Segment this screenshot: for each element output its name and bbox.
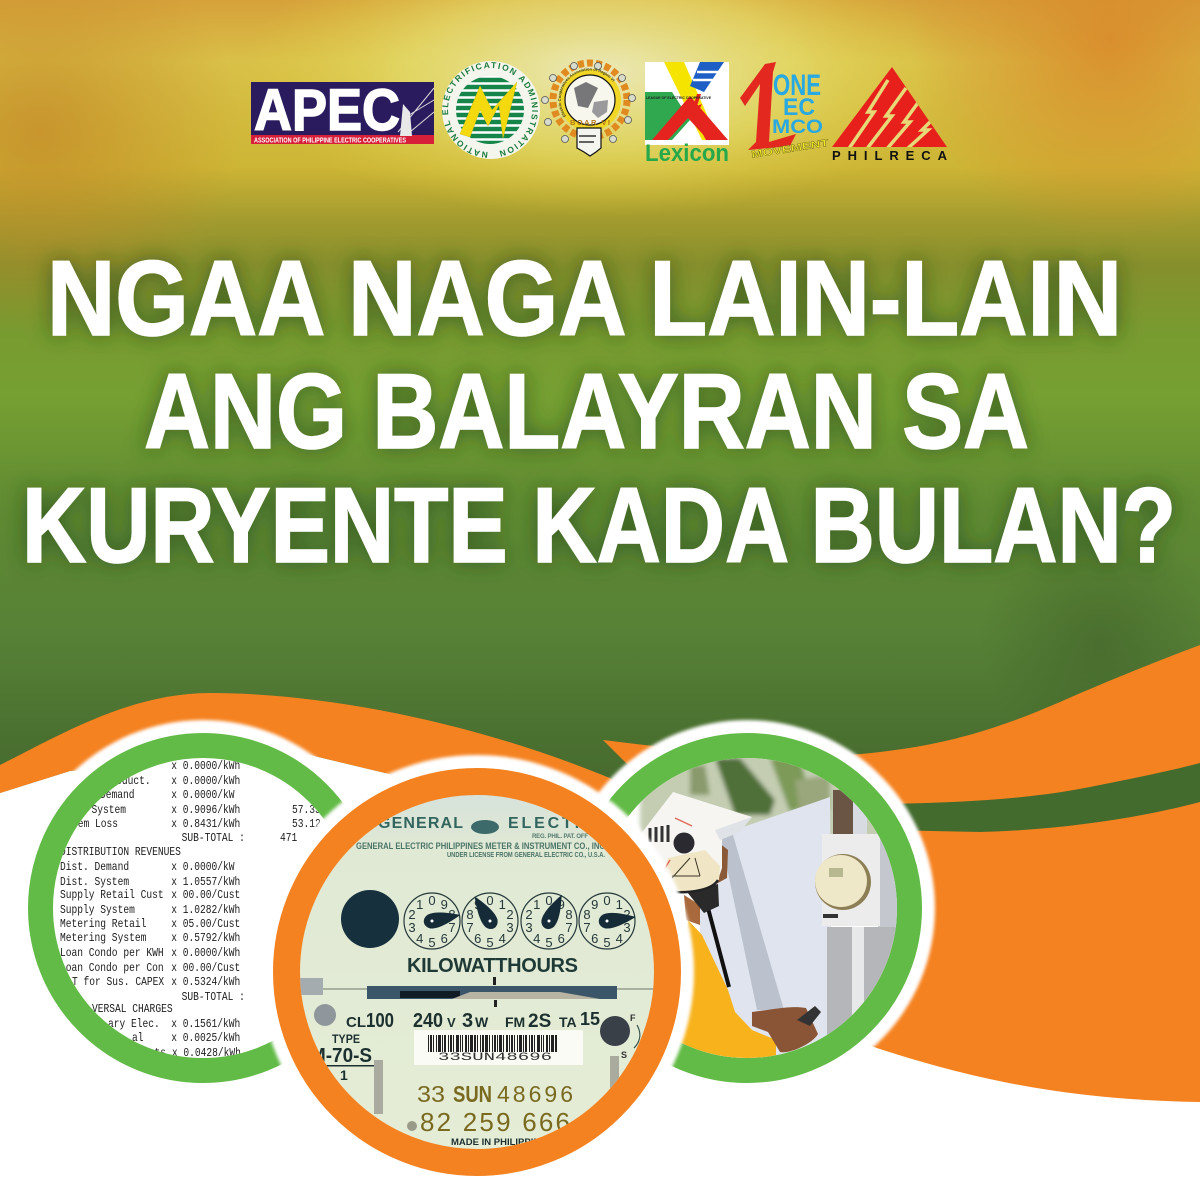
rating text — [346, 1012, 600, 1027]
bill line items: Reduct. — [110, 775, 151, 788]
metal clips — [374, 1056, 619, 1114]
bill line items: Dist. System — [60, 876, 129, 889]
circle photo: meter reader at work — [596, 718, 938, 1083]
type label — [320, 1034, 374, 1080]
logo: One EC MCO Movement: EC — [783, 94, 815, 121]
bill line items: x 0.0000/kWh — [171, 947, 240, 960]
screw — [314, 1004, 336, 1026]
logo: PHILRECA: PHILRECA — [832, 148, 948, 163]
bill line items: x 0.5324/kWh — [171, 976, 240, 989]
white lower background — [0, 755, 900, 1200]
meter brand text: GENERAL — [378, 815, 463, 832]
bill line items: 471 — [280, 832, 297, 845]
stamped serial numbers — [407, 1086, 572, 1132]
bill line items: x 0.5792/kWh — [171, 932, 240, 945]
disc — [341, 890, 399, 948]
dial 3: 0987654321 — [525, 893, 573, 950]
white wall — [700, 797, 832, 1060]
bill line items: Supply Retail Cust — [60, 889, 164, 902]
hand holding reader — [752, 1006, 821, 1052]
bill line items: x 0.0000/kW — [171, 789, 235, 802]
logo: Lexicon: Lexicon — [645, 140, 729, 167]
rating text: W — [475, 1014, 489, 1030]
kilowatthours label: KILOWATTHOURS — [407, 955, 578, 977]
bill line items: DISTRIBUTION REVENUES — [60, 846, 181, 859]
title — [22, 238, 1176, 585]
bill line items: 53.12 — [292, 818, 321, 831]
bill line items: x 0.9096/kWh — [171, 804, 240, 817]
rating text: 240 — [413, 1010, 443, 1032]
worker's yellow shirt — [680, 920, 776, 1058]
circle photo: kilowatt-hour meter — [260, 755, 694, 1189]
wall shadow — [720, 835, 784, 1010]
orange swoosh: right — [603, 645, 1200, 1102]
bill line items: T for Sus. CAPEX — [72, 976, 165, 989]
bill line items: x 0.8431/kWh — [171, 818, 240, 831]
bill line items: x 0.0000/kW — [171, 861, 235, 874]
bill line items: Metering System — [60, 932, 146, 945]
helmet — [640, 792, 752, 892]
serial barcode label — [414, 1030, 583, 1065]
bill line items: x 0.0025/kWh — [171, 1032, 240, 1045]
bill line items: x 0.0000/kWh — [171, 760, 240, 773]
electric meter on box — [815, 834, 880, 926]
made in label: MADE IN PHILIPPINES — [451, 1137, 553, 1148]
bill line items: x 05.00/Cust — [171, 918, 240, 931]
rating text: 15 — [580, 1009, 600, 1029]
meter brand text — [356, 815, 608, 859]
rating text: CL — [346, 1014, 366, 1031]
bill line items — [60, 760, 321, 1060]
circle photo: electric bill receipt — [28, 717, 344, 1083]
bill line items: SUB-TOTAL : — [182, 832, 245, 845]
meter brand text: GENERAL ELECTRIC PHILIPPINES METER & INSTRUMENT CO., INC. — [356, 841, 607, 851]
logo: PHILRECA — [832, 67, 948, 163]
bill line items: Loan Condo per Con — [60, 962, 164, 975]
dial 4: 0123456789 — [583, 893, 631, 950]
logo: Lexicon: LEAGUE OF ELECTRIC COOPERATIVE — [646, 96, 712, 100]
stamped serial numbers: 33 — [417, 1081, 445, 1107]
rating text: 3 — [462, 1010, 473, 1032]
helmet chin guard — [687, 884, 719, 913]
dial 2: 0123456789 — [466, 893, 514, 950]
bill line items: Demand — [100, 789, 135, 802]
helmet strap — [708, 908, 729, 987]
rating text: TA — [559, 1014, 577, 1030]
adjustment knob — [600, 1013, 640, 1060]
bill line items: . System — [80, 804, 126, 817]
logo: One EC MCO Movement: MCO — [772, 117, 823, 138]
bill line items: x 00.00/Cust — [171, 889, 240, 902]
meter brand text: ELECTRIC — [508, 815, 608, 832]
stamped serial numbers: 82 259 666 — [420, 1107, 570, 1137]
bill line items: nts x 0.0428/kWh — [149, 1047, 241, 1060]
adjustment knob: S — [621, 1050, 627, 1060]
rating text: V — [447, 1015, 456, 1030]
logo: One EC MCO Movement — [740, 62, 830, 161]
bill line items: Supply System — [60, 904, 135, 917]
bill line items: x 0.0000/kWh — [171, 775, 240, 788]
orange swoosh: left — [0, 693, 660, 840]
slot and metal bar — [300, 977, 654, 1007]
logo: APEC: ASSOCIATION OF PHILIPPINE ELECTRIC COOPERATIVES — [254, 138, 406, 144]
logo: APEC: APEC — [254, 78, 400, 143]
bill line items: Dist. Demand — [60, 861, 129, 874]
bill line items: 57.33 — [292, 804, 321, 817]
bill line items: x 1.0282/kWh — [171, 904, 240, 917]
pipes under meter — [827, 927, 897, 1037]
bill line items: ary Elec. — [108, 1018, 160, 1031]
green stripe across the orange swoosh — [880, 763, 1200, 832]
bill line items: al — [132, 1032, 144, 1045]
type label: 1 — [340, 1067, 348, 1083]
stamped serial numbers: 48696 — [497, 1081, 573, 1107]
bill line items: tem Loss — [72, 818, 118, 831]
logo: Lexicon — [645, 62, 729, 167]
logo: One EC MCO Movement: ONE — [773, 69, 821, 102]
dial 1: 0987654321 — [408, 893, 456, 950]
bill line items: x 00.00/Cust — [171, 962, 240, 975]
trunk and column — [833, 790, 853, 835]
meter brand text: UNDER LICENSE FROM GENERAL ELECTRIC CO., U.S.A. — [447, 852, 605, 859]
type label: TYPE — [332, 1032, 360, 1046]
logo: BOAR VI light bulb: BOAR VI — [570, 118, 610, 127]
bill line items: Loan Condo per KWH — [60, 947, 164, 960]
neck — [684, 895, 700, 925]
logo: One EC MCO Movement: MOVEMENT — [751, 138, 830, 161]
foliage behind wall — [637, 758, 878, 834]
logo row — [251, 60, 948, 167]
logo: National Electrification Administration: NATIONAL ELECTRIFICATION ADMINISTRATION — [442, 62, 538, 158]
rating text: 100 — [366, 1010, 394, 1032]
blurred green and yellow background — [0, 0, 1200, 880]
bill line items: x 1.0557/kWh — [171, 876, 240, 889]
adjustment knob: F — [630, 1013, 636, 1023]
stamped serial numbers: SUN — [453, 1081, 492, 1107]
title: ANG BALAYRAN SA — [144, 351, 1029, 471]
rating text: 2S — [528, 1011, 551, 1032]
rating text: FM — [505, 1014, 525, 1030]
serial barcode label: 33SUN48696 — [438, 1052, 552, 1064]
type label: M-70-S — [310, 1045, 372, 1067]
logo: BOAR VI light bulb — [541, 60, 636, 157]
bill line items: Metering Retail — [60, 918, 146, 931]
bill line items: VERSAL CHARGES — [92, 1003, 173, 1016]
meter brand text: REG. PHIL. PAT. OFF — [532, 834, 588, 840]
logo: BOAR VI light bulb: Electric Cooperatives Association of Region VI — [558, 68, 615, 118]
bill line items: x 0.1561/kWh — [171, 1018, 240, 1031]
bill line items: SUB-TOTAL : — [182, 991, 245, 1004]
